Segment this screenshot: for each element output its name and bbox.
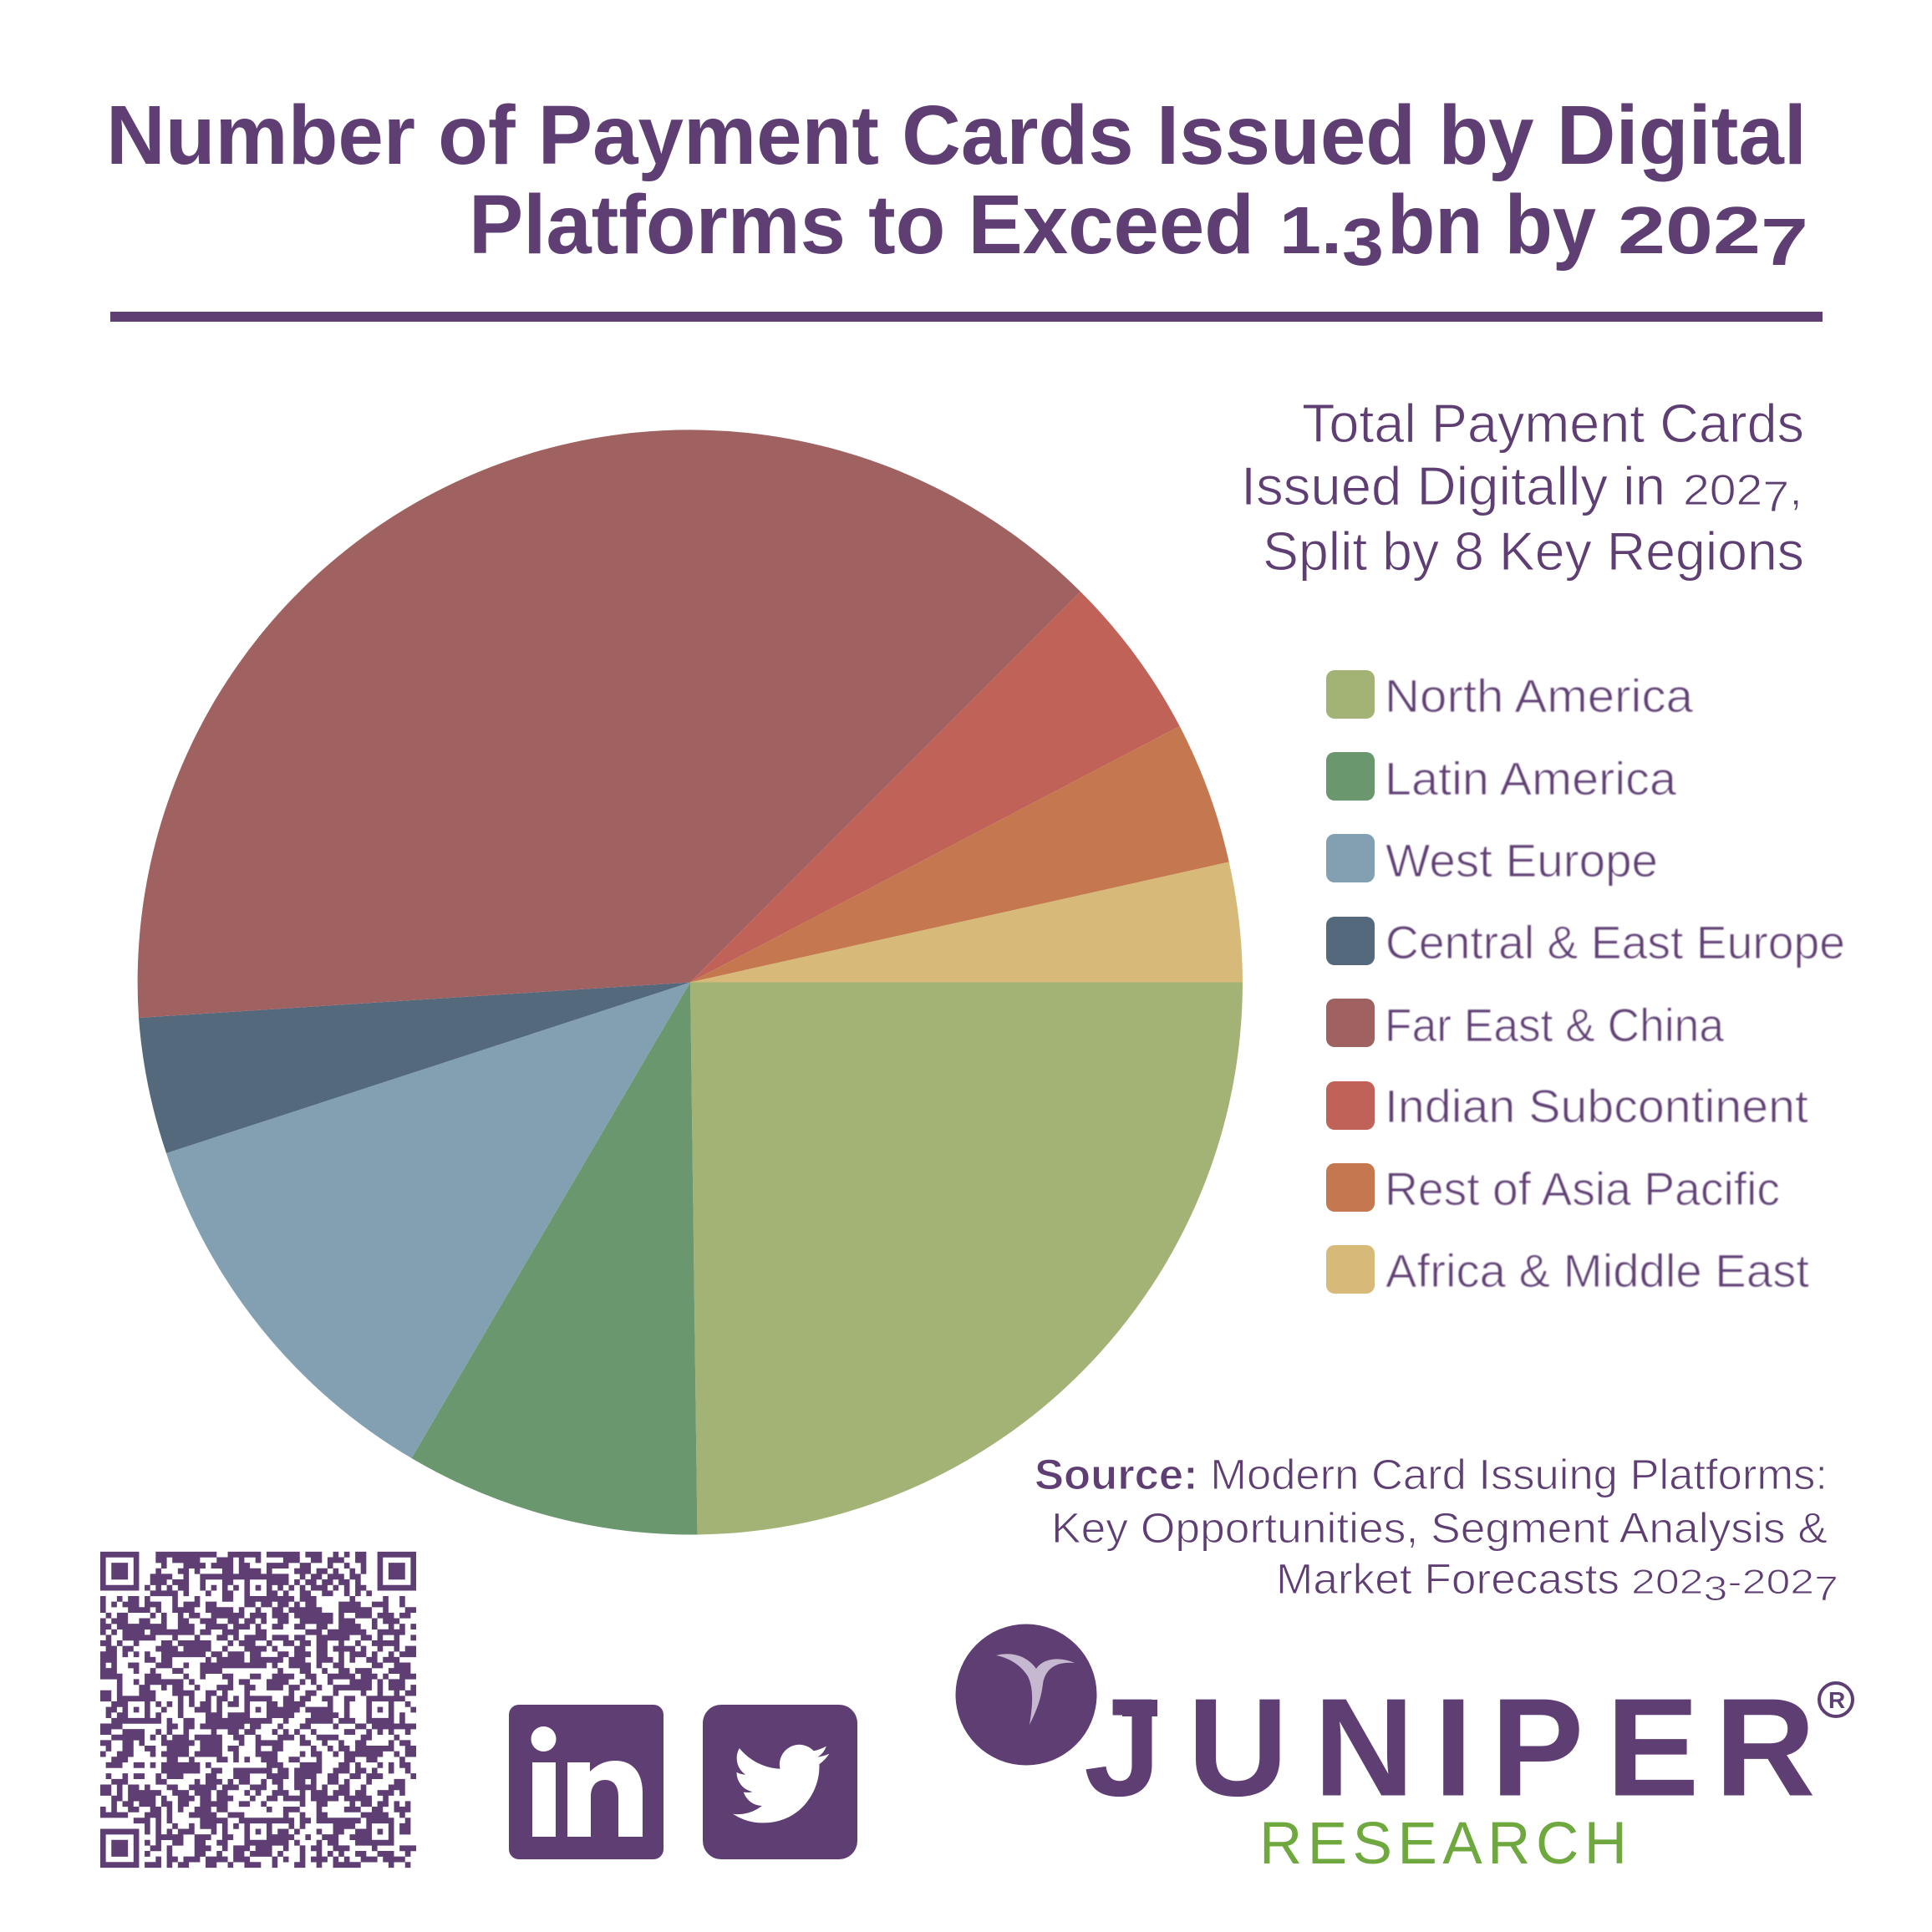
legend label: Indian Subcontinent: Indian Subcontinent: [1385, 1080, 1808, 1132]
title: [106, 89, 1808, 279]
Twitter background: [703, 1705, 857, 1859]
legend label: Central & East Europe: Central & East Europe: [1385, 916, 1845, 969]
title line 2: 3: [1342, 205, 1384, 279]
subtitle line 2: 7: [1762, 473, 1789, 521]
title line 2: 202: [1618, 193, 1729, 267]
title line 1: Number of Payment Cards Issued by Digital: [106, 89, 1807, 182]
registered letter: R: [1828, 1687, 1845, 1713]
source line 3: -202: [1727, 1562, 1814, 1601]
registered mark: [1819, 1683, 1853, 1716]
legend swatch: Far East & China: [1326, 999, 1375, 1047]
legend label: North America: North America: [1385, 669, 1694, 722]
logo leaf mark: [996, 1654, 1075, 1725]
title line 2: 7: [1761, 205, 1808, 279]
title line 2: bn by: [1387, 178, 1596, 272]
Juniper Research logo: [956, 1624, 1853, 1877]
LinkedIn background: [509, 1705, 663, 1859]
slice: Central & East Europe: [139, 983, 690, 1153]
legend swatch: Rest of Asia Pacific: [1326, 1163, 1375, 1212]
legend swatch: West Europe: [1326, 834, 1375, 882]
subtitle line 2: Issued Digitally in: [1241, 455, 1665, 516]
source line 1: Source: Modern Card Issuing Platforms:: [1035, 1451, 1828, 1498]
legend: [1326, 669, 1845, 1297]
logo circle: [956, 1624, 1096, 1765]
source line 3: [1276, 1555, 1838, 1608]
subtitle line 2: [1241, 455, 1802, 521]
title rule: [110, 312, 1823, 322]
source line 3: 3: [1704, 1568, 1727, 1608]
slice: Far East & China: [138, 430, 1080, 1018]
title line 2: Platforms to Exceed: [469, 178, 1254, 272]
slice: North America: [690, 983, 1243, 1534]
legend label: West Europe: West Europe: [1385, 834, 1658, 887]
title line 2: [469, 178, 1808, 279]
source line 3: 202: [1631, 1562, 1690, 1601]
legend swatch: Central & East Europe: [1326, 917, 1375, 965]
legend label: Latin America: Latin America: [1385, 752, 1677, 805]
icon: Twitter: [703, 1705, 857, 1859]
source note: [1035, 1451, 1838, 1608]
slice: Rest of Asia Pacific: [690, 726, 1229, 983]
source line 3: Market Forecasts: [1276, 1555, 1619, 1603]
source line 3: 7: [1814, 1568, 1838, 1608]
legend label: Far East & China: Far East & China: [1385, 999, 1725, 1051]
subtitle line 3: Split by 8 Key Regions: [1263, 521, 1804, 582]
registered ring: [1819, 1683, 1853, 1716]
Twitter bird: [733, 1745, 829, 1823]
subtitle line 2: ,: [1789, 466, 1802, 515]
LinkedIn dot: [531, 1726, 557, 1752]
legend swatch: Indian Subcontinent: [1326, 1081, 1375, 1130]
icon: LinkedIn: [509, 1705, 663, 1859]
legend swatch: Africa & Middle East: [1326, 1245, 1375, 1294]
slice: Latin America: [411, 983, 697, 1535]
legend swatch: North America: [1326, 670, 1375, 719]
logo word RESEARCH: RESEARCH: [1259, 1811, 1627, 1877]
legend label: Africa & Middle East: Africa & Middle East: [1385, 1244, 1809, 1297]
QR code: [100, 1554, 416, 1865]
legend label: Rest of Asia Pacific: Rest of Asia Pacific: [1385, 1162, 1780, 1215]
legend swatch: Latin America: [1326, 752, 1375, 801]
source line 2: Key Opportunities, Segment Analysis &: [1051, 1504, 1828, 1552]
LinkedIn glyph: [532, 1761, 643, 1837]
chart subtitle: [1241, 393, 1804, 582]
subtitle line 1: Total Payment Cards: [1302, 393, 1804, 454]
J top flag: [1122, 1700, 1157, 1716]
logo word JUNIPER: JUNIPER: [1084, 1670, 1816, 1825]
slice: Africa & Middle East: [690, 862, 1243, 983]
slice: Indian Subcontinent: [690, 592, 1180, 983]
pie chart: [138, 430, 1243, 1535]
slice: West Europe: [166, 983, 690, 1458]
title line 2: 1.: [1279, 193, 1335, 267]
subtitle line 2: 202: [1683, 466, 1756, 515]
